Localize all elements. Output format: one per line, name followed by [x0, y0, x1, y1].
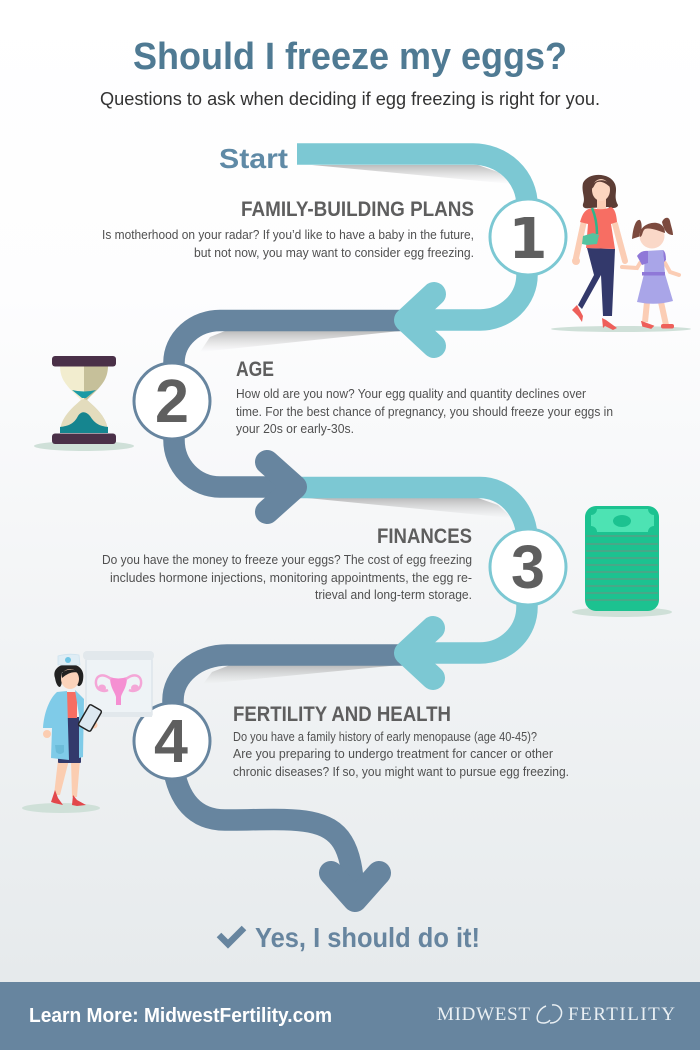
path shadows [200, 165, 512, 684]
illustration: mother and daughter [551, 175, 691, 332]
text block: family-building plans: FAMILY-BUILDING PLANS [241, 198, 474, 221]
text block: age: AGE [236, 358, 274, 381]
arrow path: step 4 to finish [173, 655, 420, 900]
text block: age [236, 358, 613, 436]
text block: family-building plans [102, 198, 474, 260]
illustration: hourglass [34, 356, 134, 451]
subtitle: Questions to ask when deciding if egg freezing is right for you. [100, 89, 600, 109]
step 3 badge [490, 529, 566, 605]
footer bar: MIDWEST [437, 1004, 530, 1025]
step 2 badge: 2 [155, 367, 189, 435]
text block: family-building plans: Is motherhood on your radar? If you’d like to have a baby in the future, [102, 228, 474, 242]
text block: age: your 20s or early-30s. [236, 422, 354, 436]
illustration: doctor and uterus chart [22, 651, 154, 813]
start label: Start [219, 143, 288, 174]
title: Should I freeze my eggs? [133, 36, 567, 78]
text block: age: time. For the best chance of pregnancy, you should freeze your eggs in [236, 405, 613, 419]
text block: fertility and health: FERTILITY AND HEALTH [233, 703, 451, 726]
step 4 badge: 4 [154, 707, 188, 775]
footer bar: Learn More: MidwestFertility.com [29, 1005, 332, 1027]
text block: fertility and health [233, 703, 569, 779]
text block: fertility and health: chronic diseases? If so, you might want to pursue egg freezing. [233, 765, 569, 779]
text block: finances: FINANCES [377, 525, 472, 548]
step 3 badge: 3 [511, 533, 545, 601]
footer bar [0, 982, 700, 1050]
arrow path: step 2 [174, 320, 420, 512]
text block: fertility and health: Are you preparing to undergo treatment for cancer or other [233, 747, 553, 761]
illustration: stack of money [572, 506, 672, 617]
step 1 badge: 1 [509, 207, 547, 272]
text block: finances: trieval and long-term storage. [315, 588, 472, 602]
text block: family-building plans: but not now, you may want to consider egg freezing. [194, 246, 474, 260]
footer bar: FERTILITY [568, 1004, 675, 1025]
step 1 badge [490, 199, 566, 275]
text block: finances: Do you have the money to freeze your eggs? The cost of egg freezing [102, 553, 472, 567]
text block: fertility and health: Do you have a family history of early menopause (age 40-45)? [233, 730, 537, 744]
text block: finances [102, 525, 472, 602]
arrow path: step 3 [300, 487, 527, 678]
result: yes icon and label: Yes, I should do it! [255, 922, 480, 953]
step 4 badge [134, 703, 210, 779]
arrow path: start to step 1 [297, 154, 527, 346]
step 2 badge [134, 363, 210, 439]
text block: age: How old are you now? Your egg quality and quantity declines over [236, 387, 586, 401]
text block: finances: includes hormone injections, monitoring appointments, the egg re- [110, 571, 472, 585]
